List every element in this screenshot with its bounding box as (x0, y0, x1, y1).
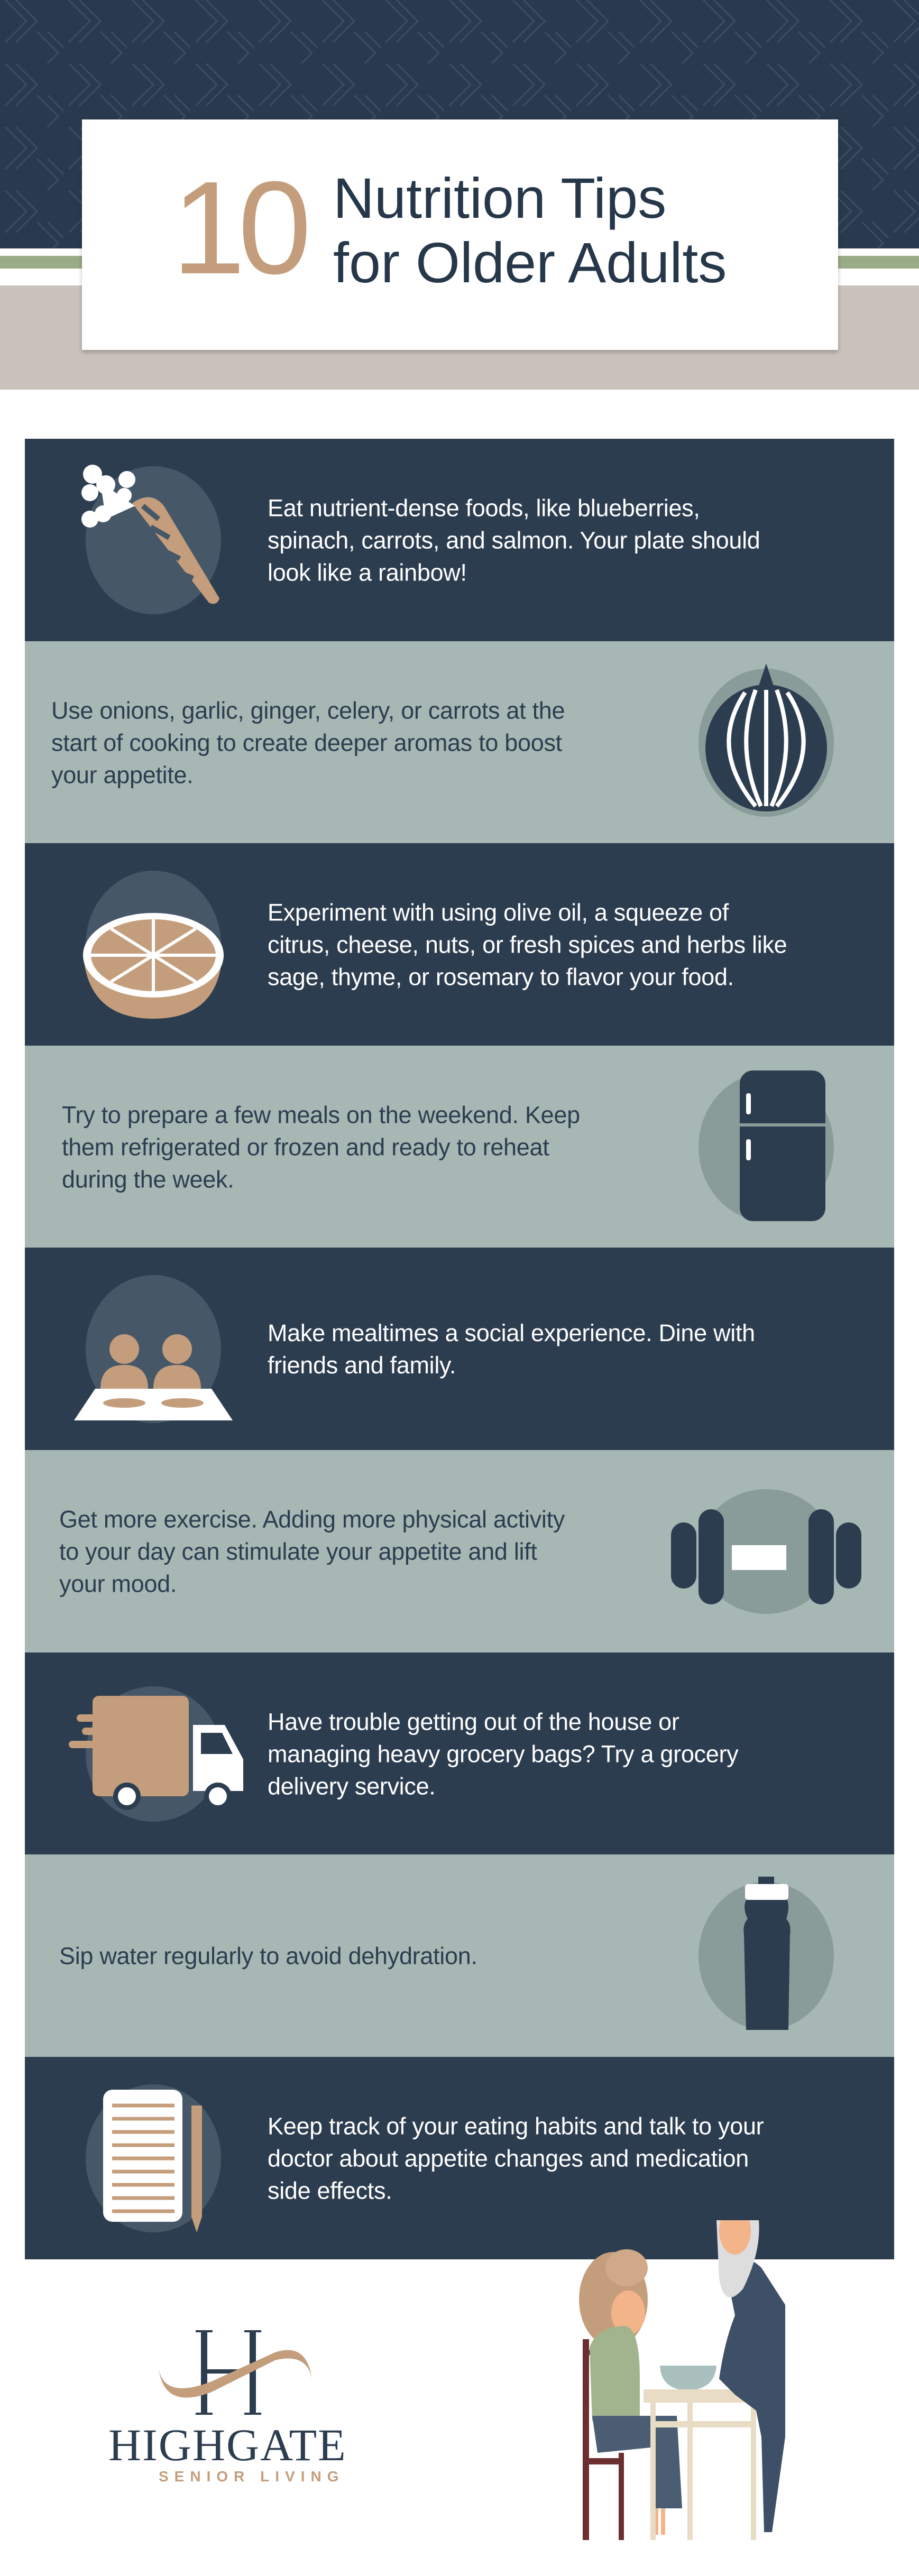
icon: water bottle (699, 1877, 834, 2030)
text (268, 494, 760, 586)
text (62, 1101, 580, 1193)
text: Get more exercise. Adding more physical activity (59, 1506, 565, 1532)
icon: citrus (83, 871, 224, 1019)
icon: notepad and pencil (86, 2084, 221, 2232)
title text: Nutrition Tips (333, 166, 666, 230)
text: your appetite. (51, 761, 193, 788)
text: citrus, cheese, nuts, or fresh spices and herbs like (268, 931, 787, 958)
man (719, 2258, 785, 2532)
text: Keep track of your eating habits and talk to your (268, 2112, 764, 2139)
text: friends and family. (268, 1351, 456, 1379)
text: sage, thyme, or rosemary to flavor your food. (268, 963, 734, 990)
text: start of cooking to create deeper aromas to boost (51, 729, 562, 756)
text: Have trouble getting out of the house or (268, 1708, 679, 1735)
text: Make mealtimes a social experience. Dine with (268, 1319, 755, 1346)
logo mark (159, 2330, 312, 2415)
icon: fridge (699, 1070, 834, 1221)
icon: dining people (74, 1275, 233, 1423)
panel 5: social meals (25, 1248, 894, 1450)
panel 7: grocery delivery (25, 1652, 894, 1855)
text: look like a rainbow! (268, 559, 467, 586)
table (644, 2389, 762, 2540)
text: your mood. (59, 1570, 177, 1597)
text: them refrigerated or frozen and ready to reheat (62, 1133, 549, 1160)
icon: carrot (81, 465, 221, 614)
panel 3: flavor (25, 843, 894, 1046)
text: Experiment with using olive oil, a squeeze of (268, 899, 729, 926)
title number: 10 (172, 154, 304, 301)
text: side effects. (268, 2177, 392, 2204)
title box (82, 119, 838, 350)
text (268, 899, 787, 990)
chair (583, 2339, 624, 2540)
logo subtitle: SENIOR LIVING (159, 2468, 344, 2485)
text: spinach, carrots, and salmon. Your plate should (268, 527, 760, 553)
text: Use onions, garlic, ginger, celery, or carrots at the (51, 697, 565, 724)
title text (333, 166, 727, 294)
text: during the week. (62, 1166, 234, 1193)
text: Try to prepare a few meals on the weekend. Keep (62, 1101, 580, 1128)
icon: onion (699, 663, 834, 817)
text: managing heavy grocery bags? Try a grocery (268, 1740, 738, 1767)
text (268, 1708, 738, 1799)
title text: for Older Adults (333, 230, 727, 294)
panel 6: exercise (25, 1450, 894, 1652)
illustration: elderly couple at table (579, 2220, 785, 2540)
text: doctor about appetite changes and medication (268, 2145, 749, 2172)
panel 4: meal prep (25, 1046, 894, 1248)
logo wordmark: HIGHGATE (108, 2420, 347, 2470)
header background pattern (0, 0, 919, 248)
text: Eat nutrient-dense foods, like blueberries, (268, 494, 700, 521)
logo: Highgate Senior Living (108, 2330, 347, 2485)
panel 8: water (25, 1854, 894, 2057)
panel 1: nutrient-dense foods (25, 439, 894, 641)
panel 9: track habits (25, 2057, 894, 2259)
header stripes (0, 248, 919, 390)
text: delivery service. (268, 1772, 436, 1799)
panel 2: aromatics (25, 641, 894, 844)
icon: delivery truck (69, 1686, 243, 1822)
woman (579, 2252, 648, 2347)
text (51, 697, 565, 788)
text (59, 1506, 565, 1597)
icon: dumbbell (671, 1489, 861, 1614)
text (268, 1319, 755, 1379)
text (268, 2112, 764, 2204)
text: to your day can stimulate your appetite and lift (59, 1538, 537, 1565)
text: Sip water regularly to avoid dehydration. (59, 1942, 477, 1969)
bowl (660, 2366, 716, 2390)
